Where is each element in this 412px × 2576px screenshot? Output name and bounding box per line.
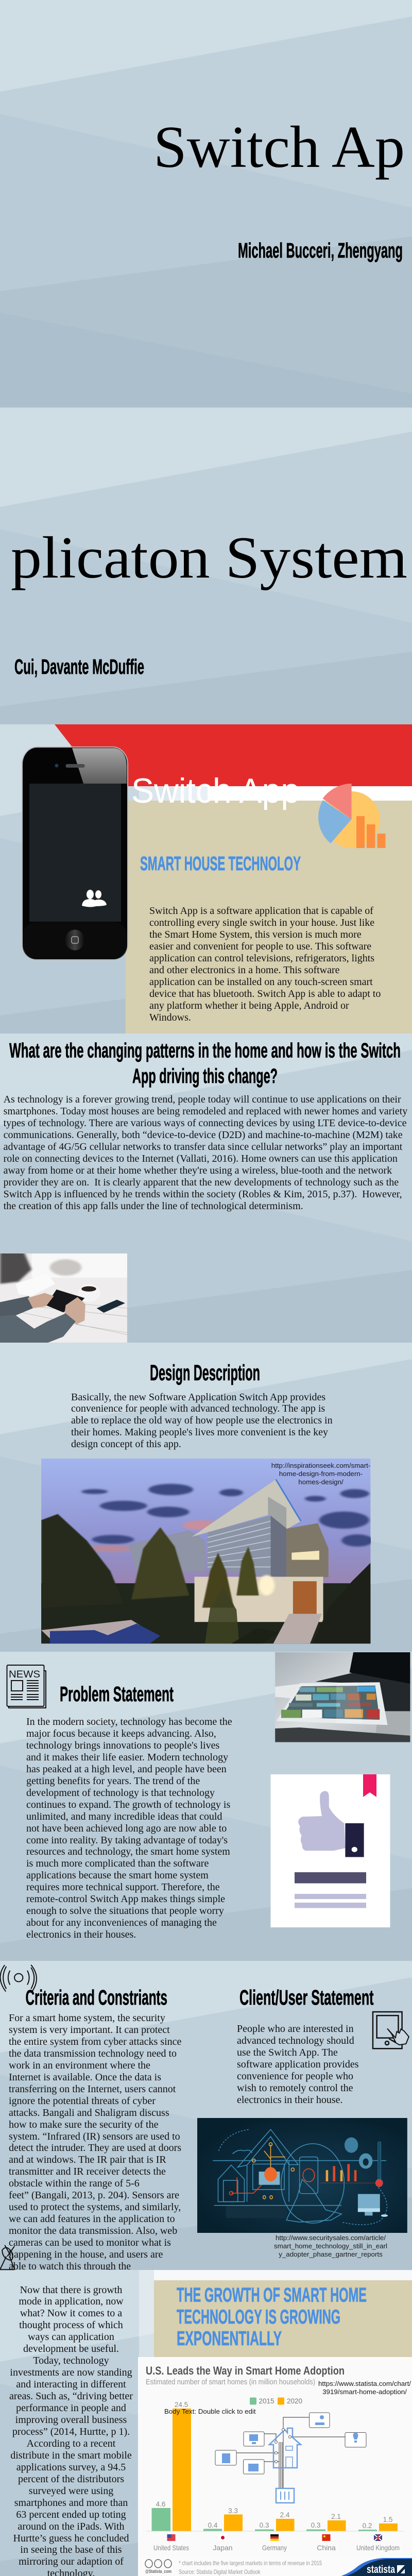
panel: growth of smart home	[139, 2270, 412, 2357]
icon: pie chart with bars	[318, 784, 385, 848]
illustration: smart home circuit	[197, 2118, 407, 2233]
text: switch app description: Switch App is a software application that is capable of controlling every single switch in your house. Just like the Smart Home System, this version is much more easier and convenient for people to use. This software application can control televisions, refrigerators, lights and other electronics in a home. This software application can be installed on any touch-screen smart device that has bluetooth. Switch App is able to adapt to any platform whether it being Apple, Android or Windows.	[149, 905, 381, 1023]
bar value labels: 3.3	[228, 2507, 238, 2515]
photo: modern smart house at dusk	[41, 1459, 373, 1643]
text: problem statement body: In the modern society, technology has become the major focus because it keeps advancing. Also, technology brings innovations to people's lives and it makes their life easier. Modern technology has peaked at a high level, and people have been getting benefits for years. The trend of the development of technology is that technology continues to expand. The growth of technology is unlimited, and many incredible ideas that could not have been achieved long ago are now able to come into reality. By taking advantage of today's resources and technology, the smart home system is much more complicated than the software applications because the smart home system requires more technical support. Therefore, the remote-control Switch App makes things simple enough to solve the situations that people worry about for any inconveniences of managing the electronics in their houses.	[26, 1716, 232, 1940]
icon: radio signal	[0, 1965, 37, 1992]
bar value labels: 0.3	[260, 2521, 269, 2529]
text: application growth body: Now that there is growth mode in application, now what? Now it comes to a thought process of which ways can application development be useful. Today, technology investments are now standing and interacting in different areas. Such as, “driving better performance in people and improving overall business process” (2014, Hurtte, p 1). According to a recent distribute in the smart mobile applications survey, a 94.5 percent of the distributors surveyed were using smartphones and more than 63 percent ended up toting around on the iPads. With Hurtte’s guess he concluded in seeing the base of this mirroring our adaption of technology.	[9, 2284, 133, 2576]
bar value labels: 0.4	[208, 2521, 218, 2529]
heading: changing patterns: App driving this change?	[132, 1065, 278, 1088]
paving	[41, 1601, 322, 1643]
statista footer: * chart includes the five largest markets in terms of revenue in 2015	[179, 2560, 322, 2567]
heading: growth exponentially	[177, 2284, 367, 2350]
chart overlay note: Body Text: Double click to edit	[164, 2408, 256, 2415]
statista footer	[138, 2556, 412, 2576]
text: changing patterns body: As technology is a forever growing trend, people today will continue to use applications on their smartphones. Today most houses are being remodeled and replaced with newer homes and variety types of technology. There are various ways of connecting devices by using LTE device-to-device communications. Generally, both “device-to-device (D2D) and machine-to-machine (M2M) take advantage of 4G/5G cellular networks to transfer data since cellular networks” play an important role on connecting devices to the Internet (Vallati, 2016). Home owners can use this application away from home or at their home whether they're using a wireless, blue-tooth and the network provider they are on. It is clearly apparent that the new developments of technology such as the Switch App is influenced by he trends within the society (Robles & Kim, 2015, p.37). However, the creation of this app falls under the line of technological determinism.	[4, 1094, 407, 1212]
chart subtitle: Estimated number of smart homes (in million households)	[146, 2378, 315, 2386]
bar value labels: 0.2	[363, 2522, 372, 2530]
bar value labels: 0.3	[311, 2521, 320, 2529]
bar value labels: 4.6	[156, 2500, 165, 2508]
diagram: connected home	[215, 2413, 366, 2503]
text: design description body: Basically, the new Software Application Switch App provides convenience for people with advanced technology. The app is able to replace the old way of how people use the electronics in their homes. Making people's lives more convenient is the key design concept of this app.	[71, 1391, 333, 1450]
title line two: plicaton System	[11, 525, 407, 590]
icon: satellite dish outline	[0, 2245, 15, 2269]
icon: newspaper: NEWS	[9, 1669, 40, 1680]
icon: smartphone	[22, 747, 128, 960]
heading: changing patterns	[9, 1040, 401, 1088]
heading: growth exponentially: EXPONENTIALLY	[177, 2328, 282, 2350]
panel heading: switch app: Switch App	[131, 771, 300, 810]
text: client statement body: People who are interested in advanced technology should use the Switch App. The software application provides convenience for people who wish to remotely control the electronics in their house.	[237, 2023, 359, 2106]
icon: newspaper	[7, 1665, 46, 1708]
country labels: China	[317, 2544, 336, 2552]
bar value labels: 2.4	[280, 2511, 290, 2519]
license icons	[145, 2560, 171, 2568]
statista footer: @Statista_com	[145, 2569, 171, 2574]
country labels	[153, 2544, 400, 2552]
bar value labels: 1.5	[383, 2516, 392, 2523]
bar chart: smart home adoption	[138, 2357, 412, 2576]
legend	[250, 2397, 302, 2405]
chart title: U.S. Leads the Way in Smart Home Adoption	[146, 2364, 345, 2377]
bar value labels: 24.5	[175, 2401, 188, 2409]
country labels: Germany	[262, 2544, 287, 2552]
heading: problem statement: Problem Statement	[60, 1682, 174, 1706]
country labels: United Kingdom	[356, 2544, 400, 2552]
bars	[146, 2409, 404, 2531]
panel: switch app intro	[55, 724, 412, 1033]
heading: smart house technoloy: SMART HOUSE TECHNOLOY	[140, 853, 301, 875]
foliage	[41, 1514, 370, 1643]
statista footer: Source: Statista Digital Market Outlook	[179, 2568, 261, 2575]
country flags	[167, 2534, 382, 2541]
heading: criteria and constriants: Criteria and Constriants	[26, 1986, 167, 2009]
legend: 2015	[259, 2397, 274, 2405]
authors line two: Cui, Davante McDuffie	[14, 655, 144, 679]
illustration: thumbs up card	[271, 1774, 390, 1927]
icon: users	[82, 890, 107, 907]
text: criteria and constraints body: For a smart home system, the security system is very important. It can protect the entire system from cyber attacks since the data transmission technology need to work in an environment where the Internet is available. Once the data is transferring on the Internet, users cannot ignore the potential threats of cyber attacks. Bangali and Shaligram discuss how to make sure the security of the system. “Infrared (IR) sensors are used to detect the intruder. They are used at doors and at windows. The IR pair that is IR transmitter and IR receiver detects the obstacle within the range of 5-6 feet” (Bangali, 2013, p. 204). Sensors are used to protect the systems, and similarly, we can add features in the application to monitor the data transmission. Also, web cameras can be used to monitor what is happening in the house, and users are able to watch this through the	[9, 2012, 181, 2272]
icon: thumbs up	[298, 1791, 364, 1857]
bar value labels	[156, 2401, 392, 2530]
caption: house photo source: http://inspirationseek.com/smart- home-design-from-modern- homes-design/	[271, 1462, 370, 1486]
heading: design description: Design Description	[150, 1361, 260, 1385]
title line one: Switch Ap	[153, 114, 405, 180]
photo: tablet on laptop	[275, 1652, 410, 1742]
statista footer: statista	[367, 2564, 395, 2575]
icon: tablet touch	[373, 2012, 409, 2048]
house body	[129, 1479, 329, 1625]
bar value labels: 2.1	[331, 2513, 341, 2520]
country labels: Japan	[213, 2544, 233, 2552]
caption: chart source: https://www.statista.com/chart/ 3919/smart-home-adoption/	[318, 2380, 411, 2396]
country labels: United States	[153, 2544, 189, 2552]
photo: hands holding a tablet	[0, 1251, 127, 1343]
legend: 2020	[287, 2397, 302, 2405]
caption: circuit illustration source: http://www.securitysales.com/article/ smart_home_technology_still_in_earl y_adopter_phase_gartner_reports	[274, 2234, 387, 2258]
